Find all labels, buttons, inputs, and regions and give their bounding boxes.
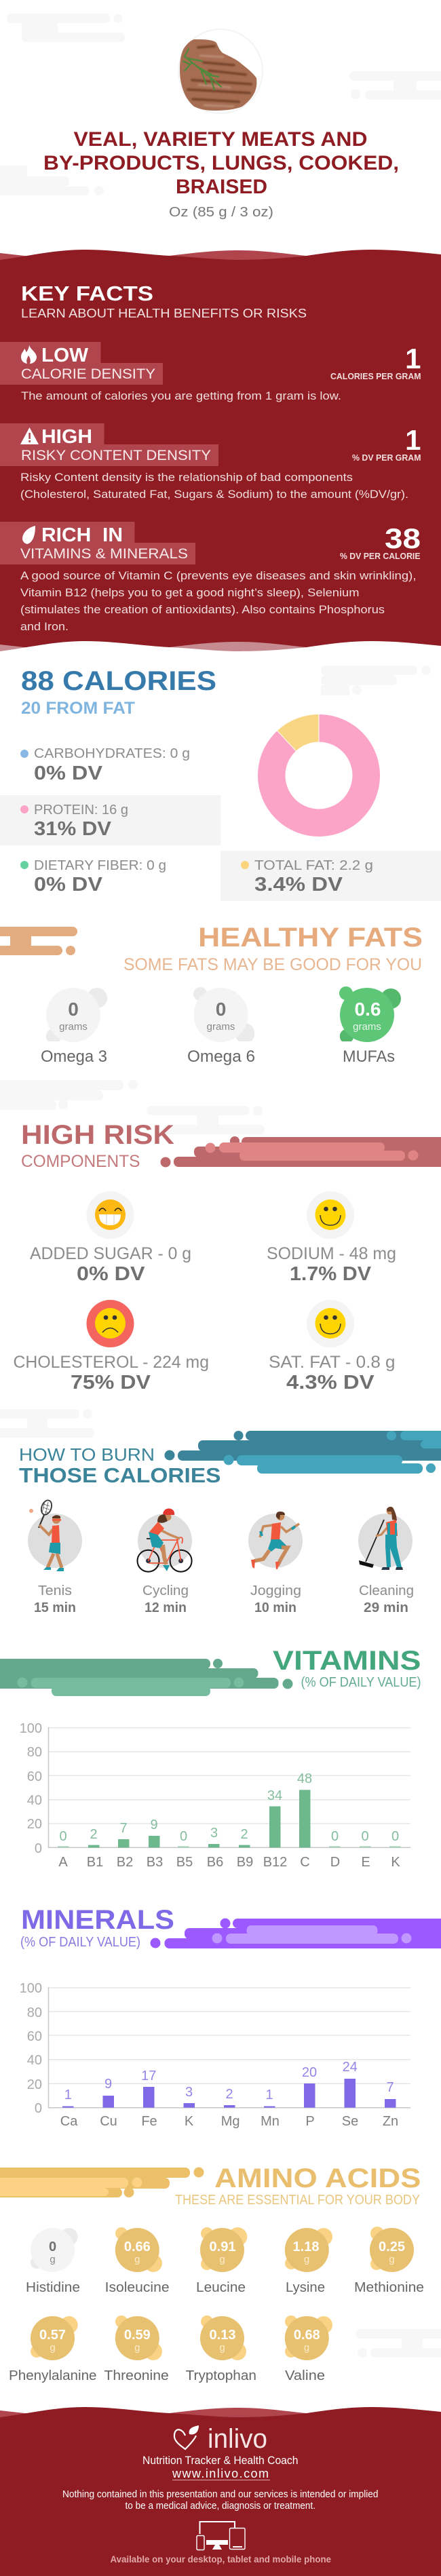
fact: high risky content density: HIGH [41, 426, 92, 448]
bar chart: vitamins: K [391, 1855, 400, 1870]
heading: amino acids: THESE ARE ESSENTIAL FOR YOUR BODY [175, 2193, 420, 2208]
stat: MUFAs: MUFAs [343, 1047, 395, 1066]
amino: tryptophan [186, 2315, 256, 2383]
heading: how to burn those calories: THOSE CALORIES [19, 1463, 221, 1487]
amino: leucine: Leucine [196, 2280, 246, 2295]
amino: phenylalanine: 0.57 [39, 2328, 66, 2343]
icon: warning triangle [20, 427, 39, 444]
amino: histidine [26, 2228, 80, 2295]
bar chart: minerals: 17 [141, 2069, 156, 2083]
donut chart: calorie sources [258, 714, 380, 837]
fact: rich in vitamins and minerals: VITAMINS & MINERALS [20, 546, 188, 562]
bar chart: vitamins: 3 [210, 1826, 218, 1841]
serving size: Oz (85 g / 3 oz) [169, 205, 273, 220]
nutrient: total fat: 3.4% DV [254, 874, 343, 896]
fact: low calorie density [0, 342, 421, 402]
logo: inlivo [174, 2424, 267, 2454]
amino: leucine [196, 2227, 247, 2295]
fact: rich in vitamins and minerals: Vitamin B12 (helps you to get a good night’s sleep), Selenium [20, 586, 360, 599]
bar chart: minerals: 9 [104, 2077, 112, 2092]
amino: isoleucine: 0.66 [124, 2239, 151, 2254]
bar chart: vitamins: 0 [331, 1829, 339, 1844]
heading: 88 calories: 88 CALORIES [21, 666, 216, 696]
amino: phenylalanine [9, 2316, 96, 2383]
activity: tennis [28, 1499, 82, 1615]
activity: jogging [248, 1512, 303, 1615]
heading: 88 calories: 20 FROM FAT [21, 699, 135, 718]
amino: tryptophan: Tryptophan [186, 2368, 256, 2383]
amino: valine: g [304, 2342, 309, 2353]
fact: rich in vitamins and minerals: % DV PER CALORIE [340, 551, 421, 561]
heading: high risk: HIGH RISK [21, 1120, 174, 1150]
fact: high risky content density: Risky Content density is the relationship of bad components [20, 471, 353, 484]
bar chart: minerals: 1 [64, 2088, 72, 2102]
bar chart: minerals: Mg [221, 2114, 239, 2129]
amino: histidine: g [50, 2254, 56, 2265]
heading: vitamins [273, 1646, 421, 1690]
bar chart: minerals: 0 [35, 2101, 42, 2116]
fact: low calorie density: CALORIE DENSITY [21, 366, 155, 382]
amino: valine [285, 2315, 332, 2383]
stat: MUFAs: grams [353, 1021, 381, 1033]
disclaimer: Nothing contained in this presentation and our services is intended or implied [62, 2488, 379, 2500]
activity: jogging: 10 min [254, 1600, 296, 1615]
risk: saturated fat [269, 1300, 395, 1393]
disclaimer [62, 2488, 379, 2512]
bar chart: minerals: 7 [386, 2080, 394, 2095]
bar chart: minerals: P [305, 2114, 315, 2129]
nutrient: dietary fiber: DIETARY FIBER: 0 g [34, 858, 166, 873]
tagline: Nutrition Tracker & Health Coach [142, 2454, 299, 2467]
amino: methionine: Methionine [354, 2280, 424, 2295]
heading: minerals: (% OF DAILY VALUE) [20, 1935, 140, 1950]
amino: tryptophan: g [219, 2342, 225, 2353]
risk: saturated fat: SAT. FAT - 0.8 g [269, 1353, 395, 1372]
nutrient: protein: PROTEIN: 16 g [34, 803, 128, 818]
banner: minerals decoration [151, 1919, 441, 1948]
stat: omega 3 [41, 988, 107, 1066]
heading: high risk [21, 1120, 174, 1171]
bar chart: vitamins: 0 [391, 1829, 399, 1844]
bar chart: vitamins: A [58, 1855, 68, 1870]
logo: inlivo: inlivo [208, 2424, 267, 2454]
bar chart: vitamins: 80 [27, 1745, 42, 1760]
heading: amino acids: AMINO ACIDS [214, 2164, 421, 2193]
bar chart: minerals: 1 [265, 2088, 273, 2102]
icon: flame [21, 345, 37, 364]
website link: www.inlivo.com [172, 2467, 269, 2480]
bar chart: vitamins [20, 1721, 410, 1870]
amino: lysine: 1.18 [293, 2239, 319, 2254]
heading: how to burn those calories [19, 1444, 221, 1487]
icon: devices [197, 2522, 245, 2550]
title: BY-PRODUCTS, LUNGS, COOKED, [43, 152, 399, 174]
icon: grilled meat photo in circle [178, 29, 263, 113]
amino: threonine: Threonine [104, 2368, 169, 2383]
nutrient: carbohydrates [20, 746, 190, 784]
bar chart: minerals [20, 1981, 410, 2129]
stat: omega 6: grams [207, 1021, 235, 1033]
risk: sodium: SODIUM - 48 mg [267, 1244, 396, 1263]
fact: high risky content density: 1 [405, 424, 421, 456]
fact: low calorie density: The amount of calories you are getting from 1 gram is low. [21, 389, 341, 402]
title [43, 128, 399, 198]
bar chart: vitamins: 2 [240, 1827, 248, 1842]
amino: isoleucine [105, 2227, 170, 2295]
stat: omega 6 [187, 987, 255, 1066]
amino: tryptophan: 0.13 [210, 2328, 235, 2343]
nutrient: carbohydrates: 0% DV [34, 763, 103, 784]
amino: histidine: Histidine [26, 2280, 80, 2295]
bar chart: vitamins: C [300, 1855, 310, 1870]
stat: MUFAs: 0.6 [355, 999, 381, 1020]
heading: healthy fats: HEALTHY FATS [198, 923, 423, 953]
bar chart: minerals: 3 [185, 2085, 193, 2100]
amino: phenylalanine: Phenylalanine [9, 2368, 96, 2383]
stat: omega 6: 0 [216, 999, 226, 1020]
stat: omega 6: Omega 6 [187, 1047, 255, 1066]
fact: rich in vitamins and minerals: RICH IN [41, 524, 123, 546]
banner: amino acids decoration [0, 2167, 204, 2197]
risk: added sugar [30, 1191, 191, 1285]
bar chart: vitamins: E [361, 1855, 370, 1870]
risk: sodium [267, 1191, 396, 1285]
fact: low calorie density: LOW [41, 345, 89, 366]
activity: tennis: Tenis [38, 1583, 72, 1598]
fact: high risky content density [0, 423, 421, 501]
fact: rich in vitamins and minerals: (stimulates the creation of antioxidants). Also contains Phosphorus [20, 603, 385, 616]
fact: low calorie density: CALORIES PER GRAM [330, 371, 421, 381]
amino: leucine: g [219, 2254, 225, 2265]
risk: saturated fat: 4.3% DV [286, 1372, 375, 1393]
heading: healthy fats [123, 923, 423, 974]
fact: rich in vitamins and minerals: A good source of Vitamin C (prevents eye diseases and skin wrinkling), [20, 569, 417, 582]
heading: vitamins: VITAMINS [273, 1646, 421, 1676]
bar chart: vitamins: 20 [27, 1817, 42, 1832]
nutrient: total fat: TOTAL FAT: 2.2 g [254, 858, 373, 873]
activity: cleaning [358, 1507, 414, 1615]
bar chart: vitamins: D [330, 1855, 340, 1870]
bar chart: vitamins: 60 [27, 1769, 42, 1784]
risk: added sugar: 0% DV [77, 1263, 145, 1285]
bar chart: minerals: Ca [60, 2114, 78, 2129]
stat: omega 3: grams [59, 1021, 88, 1033]
bar chart: vitamins: 100 [20, 1721, 42, 1736]
amino: threonine: 0.59 [124, 2328, 151, 2343]
activity: jogging: Jogging [250, 1583, 301, 1598]
bar chart: minerals: 24 [343, 2060, 358, 2075]
bar chart: minerals: 60 [27, 2029, 42, 2044]
amino: threonine [104, 2315, 169, 2383]
amino: isoleucine: g [134, 2254, 140, 2265]
activity: cycling [137, 1508, 192, 1615]
amino: leucine: 0.91 [210, 2239, 235, 2254]
bar chart: minerals: Se [342, 2114, 358, 2129]
heading: key facts: LEARN ABOUT HEALTH BENEFITS OR RISKS [21, 307, 307, 320]
nutrient: dietary fiber: 0% DV [34, 874, 103, 896]
activity: cleaning: 29 min [364, 1600, 408, 1615]
activity: cleaning: Cleaning [359, 1583, 414, 1598]
fact: rich in vitamins and minerals: and Iron. [20, 620, 69, 633]
amino: valine: 0.68 [294, 2328, 320, 2343]
heading: 88 calories [21, 666, 216, 718]
title: VEAL, VARIETY MEATS AND [73, 128, 368, 151]
fact: high risky content density: (Cholesterol, Saturated Fat, Sugars & Sodium) to the amount (%DV/gr). [20, 488, 408, 501]
amino: methionine: 0.25 [379, 2239, 405, 2254]
stat: MUFAs [339, 986, 401, 1066]
heading: how to burn those calories: HOW TO BURN [19, 1444, 155, 1465]
bar chart: vitamins: 34 [267, 1788, 282, 1803]
amino: methionine: g [389, 2254, 395, 2265]
title: BRAISED [176, 176, 267, 198]
bar chart: vitamins: B1 [87, 1855, 103, 1870]
amino: isoleucine: Isoleucine [105, 2280, 170, 2295]
amino: methionine [354, 2227, 424, 2295]
banner: vitamins decoration [0, 1659, 293, 1696]
amino: phenylalanine: g [50, 2342, 56, 2353]
bar chart: vitamins: 2 [90, 1827, 98, 1842]
bar chart: vitamins: 0 [361, 1829, 369, 1844]
risk: added sugar: ADDED SUGAR - 0 g [30, 1244, 191, 1263]
nutrient: protein [0, 795, 221, 845]
bar chart: vitamins: 9 [150, 1818, 158, 1832]
bar chart: vitamins: B2 [117, 1855, 133, 1870]
activity: cycling: 12 min [145, 1600, 187, 1615]
footer note: Available on your desktop, tablet and mobile phone [110, 2554, 331, 2564]
nutrient: total fat [220, 851, 441, 901]
fact: rich in vitamins and minerals [0, 522, 421, 633]
amino: lysine [285, 2228, 332, 2295]
bar chart: vitamins: 0 [35, 1841, 42, 1856]
heading: key facts [21, 282, 307, 320]
bar chart: vitamins: B12 [263, 1855, 287, 1870]
bar chart: vitamins: 0 [59, 1829, 67, 1844]
heading: amino acids [175, 2164, 421, 2208]
banner: healthy fats decoration [0, 927, 77, 955]
fact: low calorie density: 1 [405, 343, 421, 374]
activity: cycling: Cycling [142, 1583, 189, 1598]
bar chart: vitamins: B9 [237, 1855, 253, 1870]
bar chart: vitamins: 40 [27, 1793, 42, 1808]
bar chart: minerals: 2 [225, 2087, 233, 2102]
activity: tennis: 15 min [34, 1600, 76, 1615]
bar chart: minerals: Zn [383, 2114, 398, 2129]
banner: high risk decoration [160, 1136, 441, 1167]
stat: omega 3: Omega 3 [41, 1047, 107, 1066]
icon: leaf [22, 526, 35, 544]
nutrient: carbohydrates: CARBOHYDRATES: 0 g [34, 746, 190, 761]
heading: healthy fats: SOME FATS MAY BE GOOD FOR YOU [123, 955, 422, 974]
bar chart: minerals: 20 [302, 2065, 317, 2080]
bar chart: vitamins: B5 [176, 1855, 193, 1870]
amino: threonine: g [134, 2342, 140, 2353]
heading: high risk: COMPONENTS [21, 1152, 140, 1171]
panel: footer [0, 2407, 441, 2576]
bar chart: vitamins: B3 [147, 1855, 163, 1870]
bar chart: vitamins: 0 [180, 1829, 187, 1844]
disclaimer: to be a medical advice, diagnosis or treatment. [125, 2500, 315, 2512]
fact: high risky content density: % DV PER GRAM [352, 453, 421, 463]
bar chart: minerals: 100 [20, 1981, 42, 1996]
bar chart: minerals: 20 [27, 2077, 42, 2092]
bar chart: vitamins: 48 [297, 1771, 312, 1786]
heading: minerals [20, 1905, 174, 1950]
risk: cholesterol: CHOLESTEROL - 224 mg [14, 1353, 209, 1372]
fact: high risky content density: RISKY CONTENT DENSITY [21, 448, 211, 463]
fact: rich in vitamins and minerals: 38 [385, 522, 421, 554]
bar chart: vitamins: B6 [207, 1855, 223, 1870]
bar chart: minerals: 80 [27, 2005, 42, 2020]
stat: omega 3: 0 [68, 999, 79, 1020]
bar chart: minerals: Fe [141, 2114, 157, 2129]
risk: sodium: 1.7% DV [290, 1263, 372, 1285]
amino: histidine: 0 [49, 2239, 56, 2254]
panel: key facts [0, 250, 441, 658]
amino: valine: Valine [285, 2368, 325, 2383]
amino: lysine: Lysine [286, 2280, 325, 2295]
bar chart: minerals: Mn [261, 2114, 280, 2129]
risk: cholesterol [14, 1300, 209, 1393]
heading: key facts: KEY FACTS [21, 282, 153, 305]
amino: lysine: g [304, 2254, 309, 2265]
bar chart: minerals: Cu [100, 2114, 117, 2129]
bar chart: minerals: K [185, 2114, 194, 2129]
banner: burn calories decoration [164, 1431, 441, 1474]
heading: minerals: MINERALS [21, 1905, 174, 1935]
risk: cholesterol: 75% DV [71, 1372, 151, 1393]
bar chart: vitamins: 7 [119, 1821, 128, 1836]
bar chart: minerals: 40 [27, 2053, 42, 2068]
nutrient: protein: 31% DV [34, 818, 112, 840]
nutrient: dietary fiber [20, 858, 166, 896]
heading: vitamins: (% OF DAILY VALUE) [301, 1675, 421, 1690]
